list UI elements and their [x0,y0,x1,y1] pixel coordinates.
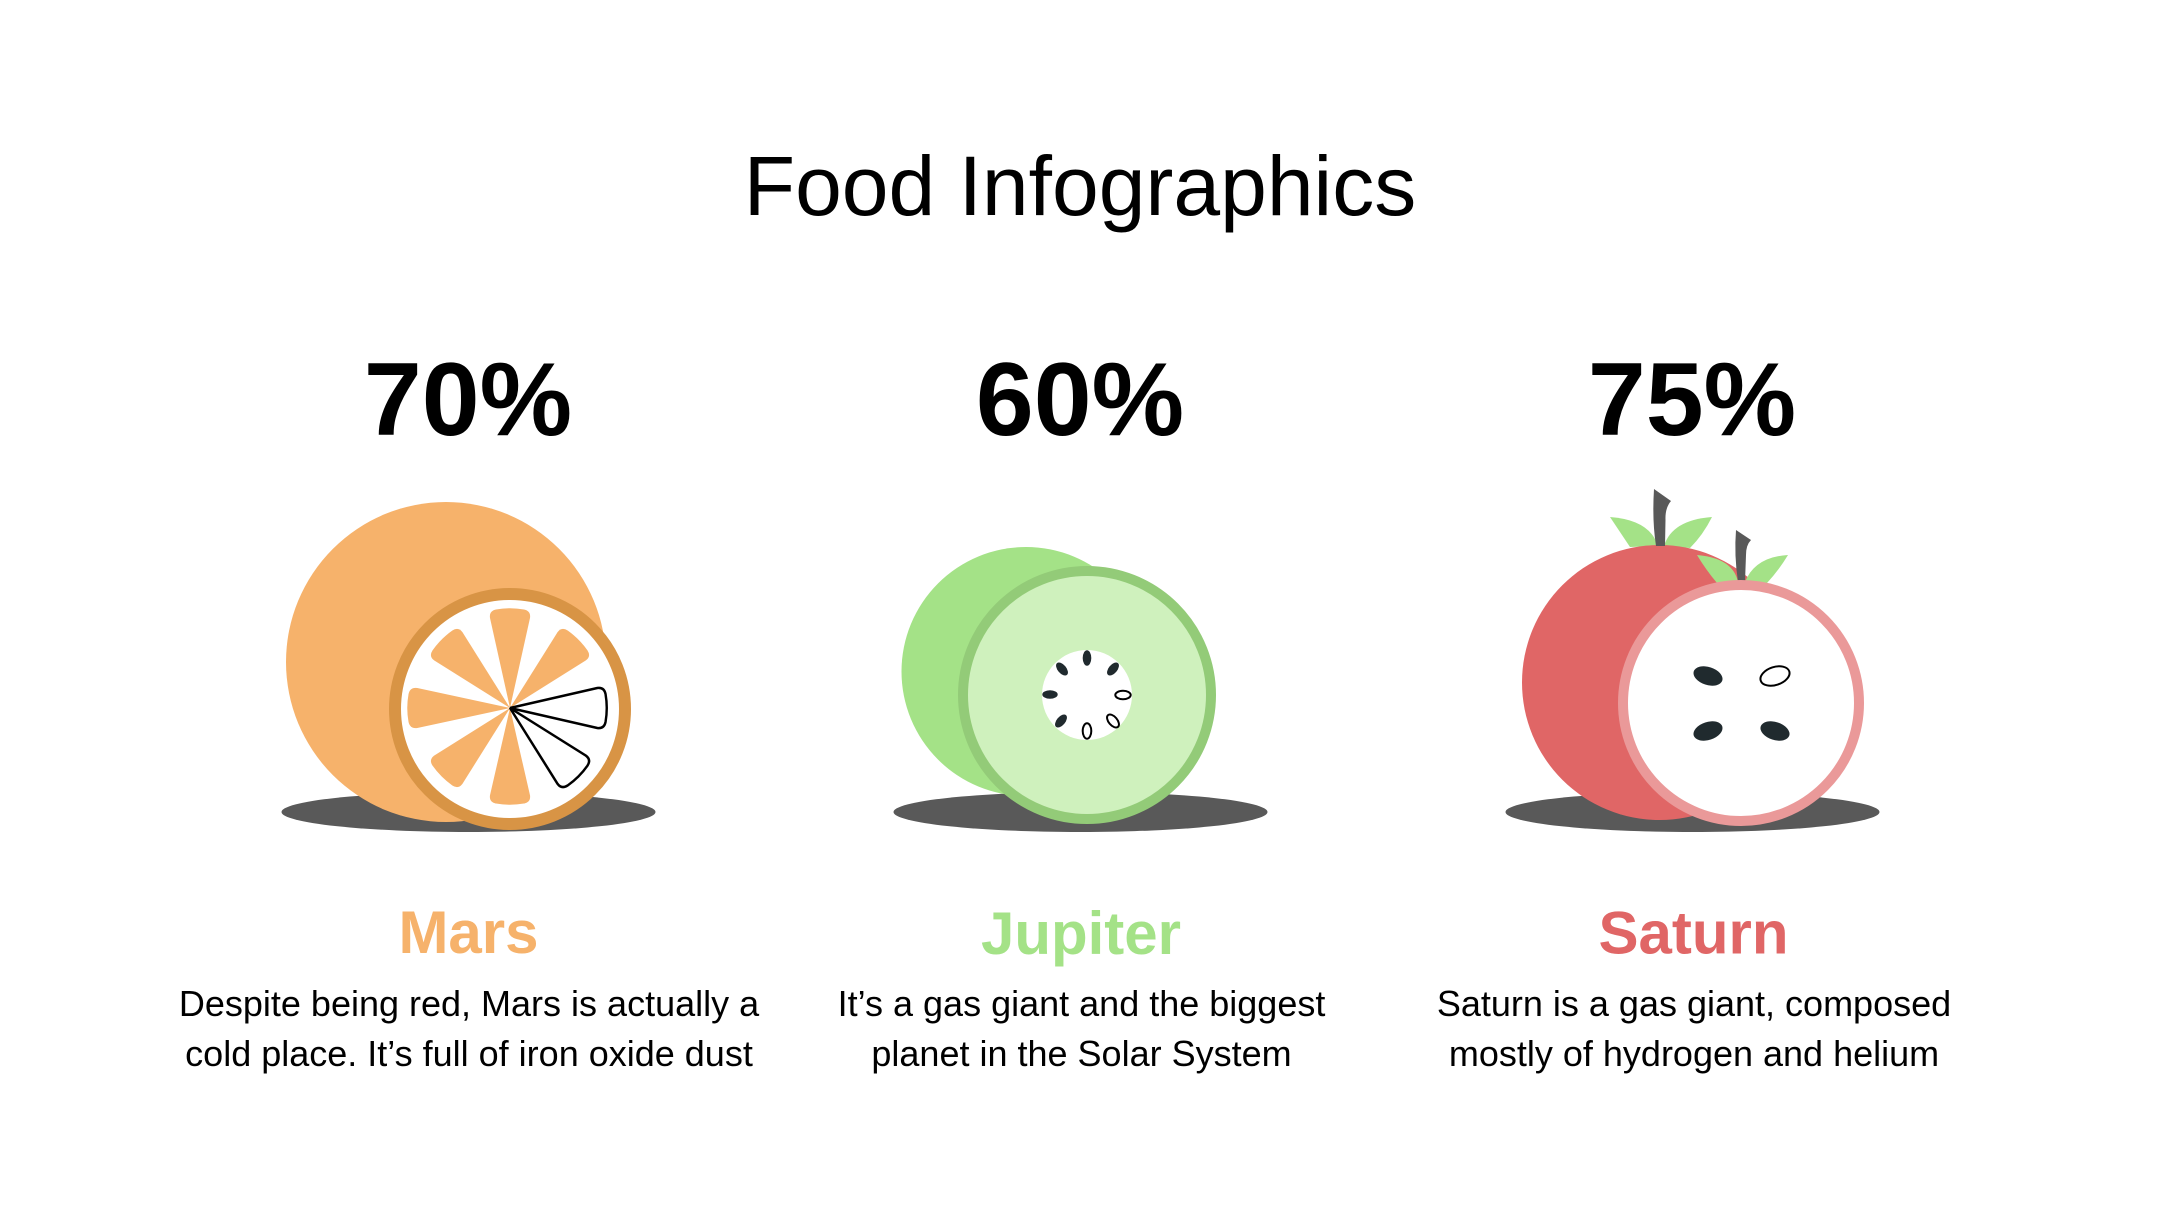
icon: orange [282,502,656,832]
description: Jupiter: It’s a gas giant and the biggest [838,983,1325,1024]
panel: Mars [179,342,760,1074]
description: Mars: cold place. It’s full of iron oxide dust [185,1033,753,1074]
panel: Jupiter [838,342,1325,1074]
description: Mars: Despite being red, Mars is actually a [179,983,760,1024]
icon: kiwi [894,547,1268,832]
percentage: 75%: 75% [1588,342,1796,458]
description: Saturn: Saturn is a gas giant, composed [1437,983,1951,1024]
panel: Saturn [1437,342,1951,1074]
heading: Jupiter: Jupiter [981,900,1181,967]
heading: Saturn: Saturn [1598,900,1789,966]
percentage: 70%: 70% [364,342,572,458]
title: Food Infographics [744,139,1416,233]
heading: Mars: Mars [398,899,539,966]
percentage: 60%: 60% [976,342,1184,458]
description: Saturn: mostly of hydrogen and helium [1449,1033,1939,1074]
icon: apple [1506,489,1880,832]
description: Jupiter: planet in the Solar System [871,1033,1292,1074]
